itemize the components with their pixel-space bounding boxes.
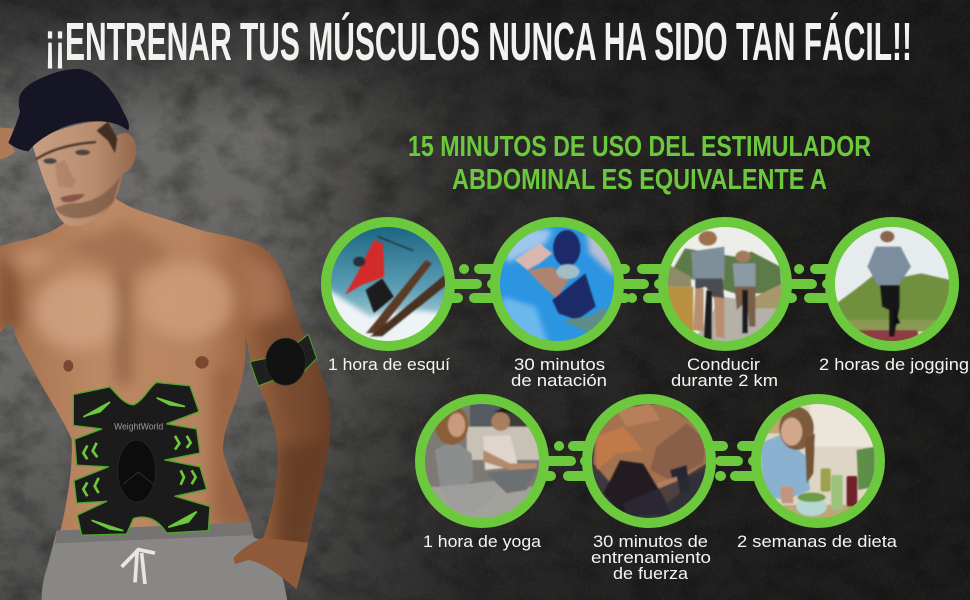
grey sweatpants [42,522,287,600]
caption: Conducir durante 2 km: durante 2 km [671,372,778,390]
green subheading: ABDOMINAL ES EQUIVALENTE A [452,164,827,196]
caption: 2 horas de jogging: 2 horas de jogging [819,356,969,374]
caption: Conducir durante 2 km: Conducir [687,356,761,374]
caption: 2 semanas de dieta: 2 semanas de dieta [737,533,898,551]
face and ear [32,121,136,226]
activity: cycling photo [663,222,790,347]
activity: yoga photo [420,399,545,525]
arm stimulator [250,334,317,386]
caption: 30 minutos de natación: 30 minutos [514,356,605,374]
activity: jogging photo [830,222,957,347]
caption: 1 hora de yoga: 1 hora de yoga [423,533,542,551]
hand in pocket [233,538,308,589]
abdominal stimulator pad [73,382,210,535]
caption: 30 minutos de entrenamiento de fuerza: entrenamiento [591,549,711,567]
black baseball cap [8,69,129,151]
caption: 30 minutos de entrenamiento de fuerza: 30 minutos de [593,533,708,551]
hand at cap [0,128,17,159]
caption: 30 minutos de natación: de natación [511,372,607,390]
muscle shading [0,222,323,542]
nipples [63,356,209,372]
activity: skiing photo [324,220,455,347]
caption: Conducir durante 2 km [671,356,778,390]
green subheading [408,131,871,196]
abdominal stimulator pad: WeightWorld [114,421,163,432]
caption: 30 minutos de entrenamiento de fuerza [591,533,711,583]
green connectors top row [450,269,840,298]
caption: 30 minutos de natación [511,356,607,390]
torso and arms [0,198,331,589]
caption: 1 hora de esquí: 1 hora de esquí [328,356,450,374]
activity: swimming photo [495,222,620,347]
activity: diet photo [755,399,880,525]
activity: strength training photo [587,399,712,525]
caption: 30 minutos de entrenamiento de fuerza: de fuerza [613,565,689,583]
green connectors bottom row [545,446,765,476]
man wearing abdominal stimulator [0,69,331,600]
green subheading: 15 MINUTOS DE USO DEL ESTIMULADOR [408,131,871,163]
